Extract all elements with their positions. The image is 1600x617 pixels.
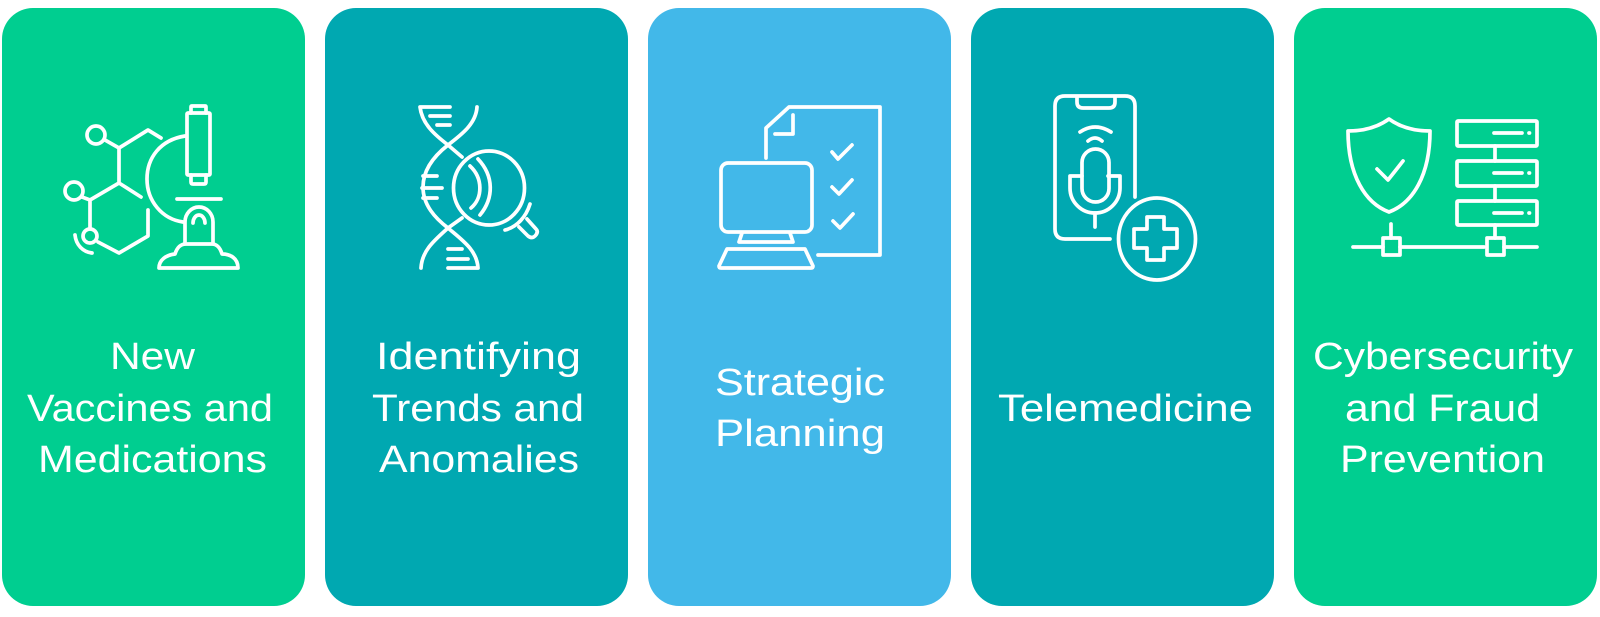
- label: new vaccines and medications: Medications: [38, 439, 267, 481]
- panel: telemedicine: [971, 8, 1274, 606]
- label: cybersecurity and fraud prevention: [1313, 336, 1573, 481]
- label: new vaccines and medications: Vaccines and: [27, 388, 273, 430]
- label: cybersecurity and fraud prevention: Cybersecurity: [1313, 336, 1573, 378]
- icon: shield and server network: [1348, 119, 1537, 255]
- label: cybersecurity and fraud prevention: and Fraud: [1345, 388, 1540, 430]
- icon: molecule and microscope: [65, 106, 238, 268]
- label: strategic planning: [715, 362, 885, 455]
- label: identifying trends and anomalies: Trends and: [372, 388, 584, 430]
- label: strategic planning: Strategic: [715, 362, 885, 404]
- label: strategic planning: Planning: [715, 413, 885, 455]
- label: identifying trends and anomalies: [372, 336, 584, 481]
- panel: identifying trends and anomalies: [325, 8, 628, 606]
- icon: phone microphone and medical cross: [1055, 96, 1196, 280]
- icon: document checklist and computer: [719, 107, 880, 268]
- panel: new vaccines and medications: [2, 8, 305, 606]
- panel: strategic planning: [648, 8, 951, 606]
- label: new vaccines and medications: New: [110, 336, 196, 378]
- label: telemedicine: Telemedicine: [998, 388, 1253, 430]
- label: new vaccines and medications: [27, 336, 273, 481]
- label: cybersecurity and fraud prevention: Prevention: [1340, 439, 1545, 481]
- panel: cybersecurity and fraud prevention: [1294, 8, 1597, 606]
- label: identifying trends and anomalies: Anomalies: [379, 439, 579, 481]
- label: identifying trends and anomalies: Identifying: [376, 336, 581, 378]
- icon: dna and magnifier: [420, 107, 537, 268]
